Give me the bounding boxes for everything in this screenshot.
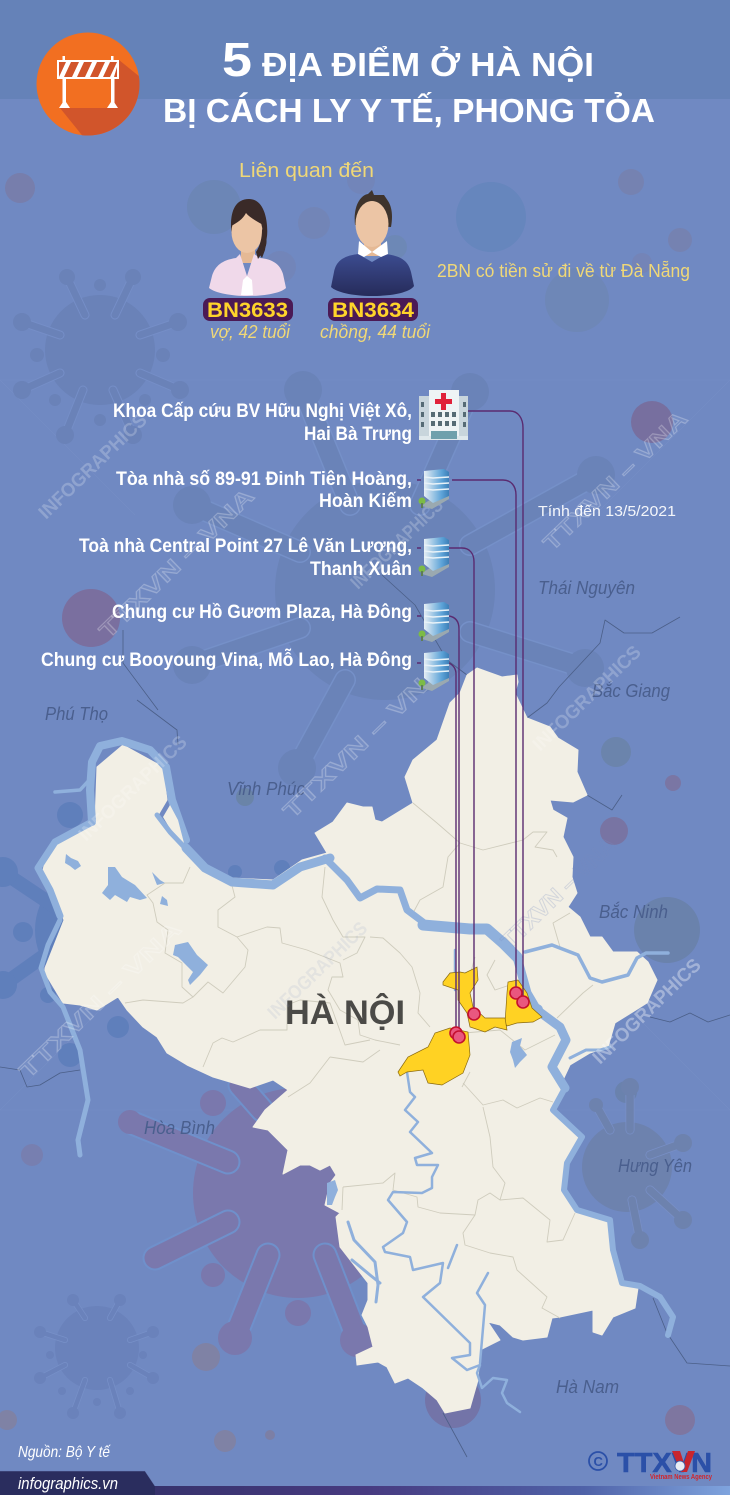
province labels: Bắc Giang — [592, 681, 670, 701]
province labels: Hưng Yên — [618, 1156, 692, 1176]
virus: lower left small — [34, 1294, 159, 1419]
province labels — [45, 578, 692, 1397]
province labels: Phú Thọ — [45, 704, 108, 724]
location 2: Hoàn Kiếm — [319, 491, 412, 512]
icon: building — [418, 469, 449, 509]
icon: hospital — [419, 390, 468, 440]
label: BN3634: BN3634 — [332, 299, 414, 322]
logo: TTXVN: Vietnam News Agency — [650, 1472, 713, 1481]
patient: BN3634 — [320, 190, 431, 342]
province labels: Vĩnh Phúc — [227, 779, 305, 799]
virus: lower right — [582, 1078, 692, 1249]
watermarks — [14, 406, 706, 1084]
logo: TTXVN: TTXVN — [617, 1447, 712, 1478]
watermarks: TTXVN – VNA — [278, 656, 450, 824]
footer site name: infographics.vn — [18, 1474, 118, 1493]
watermarks: INFOGRAPHICS — [75, 732, 192, 846]
title: BỊ CÁCH LY Y TẾ, PHONG TỎA — [163, 92, 655, 129]
caption: wife, 42: vợ, 42 tuổi — [210, 322, 291, 342]
virus: central large — [173, 371, 615, 787]
neighbouring province borders — [0, 575, 730, 1457]
icon: road barrier — [36, 32, 140, 136]
location list — [41, 390, 468, 691]
caption: husband, 44: chồng, 44 tuổi — [320, 322, 431, 342]
footer bar — [0, 1471, 730, 1495]
title: ĐỊA ĐIỂM Ở HÀ NỘI — [262, 45, 594, 83]
watermarks: TTXVN – VNA — [14, 916, 186, 1084]
location 1 — [113, 401, 412, 445]
virus: lower left purple — [118, 1085, 403, 1357]
watermarks: TTXVN – VNA — [496, 831, 621, 954]
patient: BN3633 — [203, 199, 293, 342]
note: travel history: 2BN có tiền sử đi về từ Đà Nẵng — [437, 261, 690, 281]
location 2 — [116, 469, 412, 512]
map label: Hà Nội: HÀ NỘI — [285, 993, 405, 1032]
virus: upper left — [13, 269, 189, 444]
province labels: Hòa Bình — [144, 1118, 215, 1138]
location 3: Thanh Xuân — [310, 559, 412, 580]
highlighted district: Hà Đông — [398, 1028, 470, 1085]
location 1: Khoa Cấp cứu BV Hữu Nghị Việt Xô, — [113, 401, 412, 422]
watermarks: INFOGRAPHICS — [589, 955, 706, 1069]
virus: left edge — [0, 857, 165, 1067]
watermarks: TTXVN – VNA — [94, 483, 259, 644]
highlighted district: Thanh Xuân — [443, 967, 507, 1032]
logo: TTXVN: C — [594, 1454, 604, 1469]
subheading: related to: Liên quan đến — [239, 160, 374, 182]
watermarks: INFOGRAPHICS — [264, 918, 372, 1024]
title — [163, 34, 655, 129]
icon: building — [418, 537, 449, 577]
location 2: Tòa nhà số 89-91 Đinh Tiên Hoàng, — [116, 469, 412, 490]
location 1: Hai Bà Trưng — [304, 424, 412, 445]
title: 5 — [222, 34, 252, 87]
watermarks: INFOGRAPHICS — [35, 410, 152, 524]
province labels: Thái Nguyên — [538, 578, 635, 598]
province labels: Hà Nam — [556, 1377, 619, 1397]
rivers and lakes — [38, 741, 673, 1412]
land outline — [43, 668, 657, 1413]
watermarks: INFOGRAPHICS — [529, 642, 646, 756]
watermarks: INFOGRAPHICS — [347, 495, 448, 594]
location markers — [450, 987, 529, 1043]
label: BN3633: BN3633 — [207, 299, 288, 322]
connector lines — [417, 411, 523, 1037]
icon: building — [418, 651, 449, 691]
watermarks: TTXVN – VNA — [538, 406, 692, 556]
location 3 — [79, 536, 412, 580]
province labels: Bắc Ninh — [599, 902, 668, 922]
location 4: Chung cư Hồ Gươm Plaza, Hà Đông — [112, 602, 412, 623]
location 3: Toà nhà Central Point 27 Lê Văn Lương, — [79, 536, 412, 557]
note: date: Tính đến 13/5/2021 — [538, 503, 676, 520]
location 5: Chung cư Booyoung Vina, Mỗ Lao, Hà Đông — [41, 649, 412, 671]
logo: TTXVN — [589, 1447, 713, 1481]
highlighted district: Hoàn Kiếm, Hai Bà Trưng — [505, 980, 542, 1026]
district boundaries — [125, 803, 593, 1318]
source: Nguồn: Bộ Y tế — [18, 1444, 111, 1461]
icon: building — [418, 602, 449, 642]
map: Hà Nội — [38, 668, 673, 1413]
